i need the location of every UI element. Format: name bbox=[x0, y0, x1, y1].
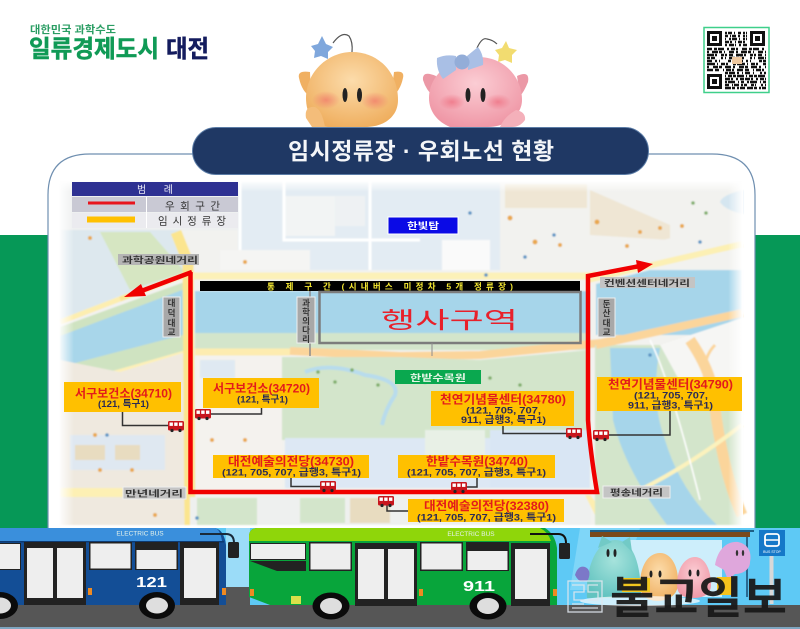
intersection label: 과학공원네거리 bbox=[118, 254, 199, 265]
intersection label: 만년네거리: 만년네거리 bbox=[125, 488, 183, 498]
legend: 범례 bbox=[137, 184, 173, 196]
bridge label: 과학의다리: 다 bbox=[302, 325, 310, 335]
banner: restricted section bbox=[200, 281, 580, 292]
stop label: 대전예술의전당 34730 bbox=[213, 454, 369, 478]
stop label: 천연기념물센터 34790: (121, 705, 707, bbox=[634, 390, 708, 402]
bridge label: 둔산대교: 교 bbox=[603, 327, 611, 337]
blue bus 121: 121 bbox=[136, 574, 167, 591]
green bus 911: ELECTRIC BUS bbox=[447, 531, 495, 538]
mascot group at bus stop bbox=[575, 536, 750, 606]
bus stop sign: BUS STOP bbox=[763, 550, 781, 554]
bus shelter roof bbox=[590, 530, 754, 597]
stop label: 대전예술의전당 34730: 대전예술의전당(34730) bbox=[228, 454, 354, 468]
bridge label: 대덕대교: 덕 bbox=[168, 308, 175, 318]
stop label: 서구보건소 34720: 서구보건소(34720) bbox=[213, 382, 310, 396]
lower road bbox=[195, 348, 290, 356]
bridge label: 과학의다리: 의 bbox=[302, 316, 310, 326]
campus blocks bbox=[238, 182, 500, 270]
stop label: 한밭수목원 34740: 한밭수목원(34740) bbox=[426, 454, 528, 468]
title pill: 임시정류장 · 우회노선 현황 bbox=[288, 138, 554, 164]
upper road bbox=[190, 244, 742, 276]
bus stop icons bbox=[168, 409, 609, 507]
stop label: 천연기념물센터 34780 bbox=[431, 391, 574, 426]
bridge label: 과학의다리: 과 bbox=[302, 298, 310, 308]
place label: 한빛탑 bbox=[388, 217, 458, 234]
stop label: 천연기념물센터 34780: 천연기념물센터(34780) bbox=[440, 392, 566, 406]
map points of interest bbox=[88, 216, 684, 517]
watermark text: 불교일보 bbox=[610, 574, 787, 623]
green bus 911 bbox=[249, 528, 570, 620]
stop label: 천연기념물센터 34780: 911, 급행3, 특구1) bbox=[461, 415, 546, 426]
blue bus 121: ELECTRIC BUS bbox=[116, 530, 164, 538]
stop label: 서구보건소 34710: (121, 특구1) bbox=[98, 399, 149, 410]
stop label: 대전예술의전당 34730: (121, 705, 707, 급행3, 특구1) bbox=[222, 468, 361, 478]
title pill bbox=[192, 128, 648, 174]
bridge label: 대덕대교: 교 bbox=[168, 327, 176, 337]
intersection label: 만년네거리 bbox=[123, 487, 186, 499]
intersection label: 평송네거리: 평송네거리 bbox=[610, 488, 663, 498]
mascot: orange character bbox=[299, 35, 403, 127]
green background band bbox=[0, 235, 800, 530]
banner: restricted section: 통 제 구 간 (시내버스 미정차 5개 정류장) bbox=[267, 282, 513, 292]
panel: white rounded map card bbox=[48, 154, 755, 530]
legend: 우회구간 bbox=[165, 200, 220, 212]
event zone bbox=[310, 291, 580, 356]
logo: Daejeon city slogan: 대전 bbox=[166, 36, 209, 63]
stop label: 천연기념물센터 34790: 천연기념물센터(34790) bbox=[608, 376, 733, 392]
watermark logo icon bbox=[568, 581, 602, 612]
stop label: 서구보건소 34720: (121, 특구1) bbox=[237, 394, 288, 406]
vertical road bbox=[176, 232, 190, 525]
bridge label: 대덕대교 bbox=[163, 297, 180, 337]
intersection label: 컨벤션센터네거리: 컨벤션센터네거리 bbox=[604, 278, 690, 288]
legend bbox=[72, 182, 238, 228]
logo: Daejeon city slogan bbox=[29, 23, 209, 63]
bridge label: 둔산대교 bbox=[598, 298, 615, 337]
place label: 한빛탑: 한빛탑 bbox=[407, 220, 440, 231]
intersection label: 컨벤션센터네거리 bbox=[600, 277, 695, 288]
legend: 임시정류장 bbox=[158, 214, 226, 228]
intersection label: 평송네거리 bbox=[603, 486, 670, 498]
stop label: 천연기념물센터 34790: 911, 급행3, 특구1) bbox=[628, 400, 713, 412]
green bus 911: 911 bbox=[463, 578, 495, 595]
map base bbox=[60, 182, 743, 525]
bottom street scene background bbox=[0, 528, 800, 629]
stop label: 대전예술의전당 32380 bbox=[408, 499, 564, 524]
logo: Daejeon city slogan: 일류경제도시 bbox=[29, 36, 159, 63]
park bbox=[282, 350, 590, 440]
stop label: 대전예술의전당 32380: (121, 705, 707, 급행3, 특구1) bbox=[417, 512, 556, 524]
stop connector lines bbox=[122, 408, 670, 511]
logo: Daejeon city slogan: 대한민국 과학수도 bbox=[30, 23, 116, 36]
event zone: 행사구역 bbox=[381, 307, 518, 333]
bridge label: 둔산대교: 산 bbox=[603, 308, 611, 318]
bridge label: 둔산대교: 둔 bbox=[603, 299, 611, 309]
stop label: 대전예술의전당 32380: 대전예술의전당(32380) bbox=[424, 499, 549, 513]
bridge label: 과학의다리: 리 bbox=[302, 334, 310, 344]
detour route: red line with arrows bbox=[124, 260, 653, 492]
stop label: 천연기념물센터 34780: (121, 705, 707, bbox=[466, 406, 541, 416]
bridge label: 둔산대교: 대 bbox=[603, 318, 611, 328]
place label: 한밭수목원: 한밭수목원 bbox=[410, 372, 466, 383]
bridge label: 과학의다리: 학 bbox=[302, 307, 310, 317]
bus stop sign bbox=[759, 530, 785, 604]
left river and banks bbox=[60, 280, 190, 390]
central river bbox=[195, 291, 590, 334]
bridge label: 대덕대교: 대 bbox=[168, 298, 176, 308]
stop label: 서구보건소 34710 bbox=[64, 382, 181, 412]
bridge label: 대덕대교: 대 bbox=[168, 318, 176, 328]
blue bus 121 bbox=[0, 528, 239, 619]
stop label: 한밭수목원 34740 bbox=[398, 454, 555, 478]
bridge label: 과학의다리 bbox=[297, 297, 315, 344]
stop label: 서구보건소 34710: 서구보건소(34710) bbox=[75, 386, 172, 400]
stop label: 천연기념물센터 34790 bbox=[597, 376, 742, 412]
map fade edges bbox=[58, 180, 744, 526]
stop label: 한밭수목원 34740: (121, 705, 707, 급행3, 특구1) bbox=[407, 468, 546, 478]
stop label: 서구보건소 34720 bbox=[203, 378, 319, 408]
QR code bbox=[704, 28, 769, 92]
right side bbox=[596, 270, 742, 335]
place label: 한밭수목원 bbox=[395, 370, 481, 384]
mascot: pink character bbox=[423, 39, 528, 127]
intersection label: 과학공원네거리: 과학공원네거리 bbox=[122, 255, 198, 265]
